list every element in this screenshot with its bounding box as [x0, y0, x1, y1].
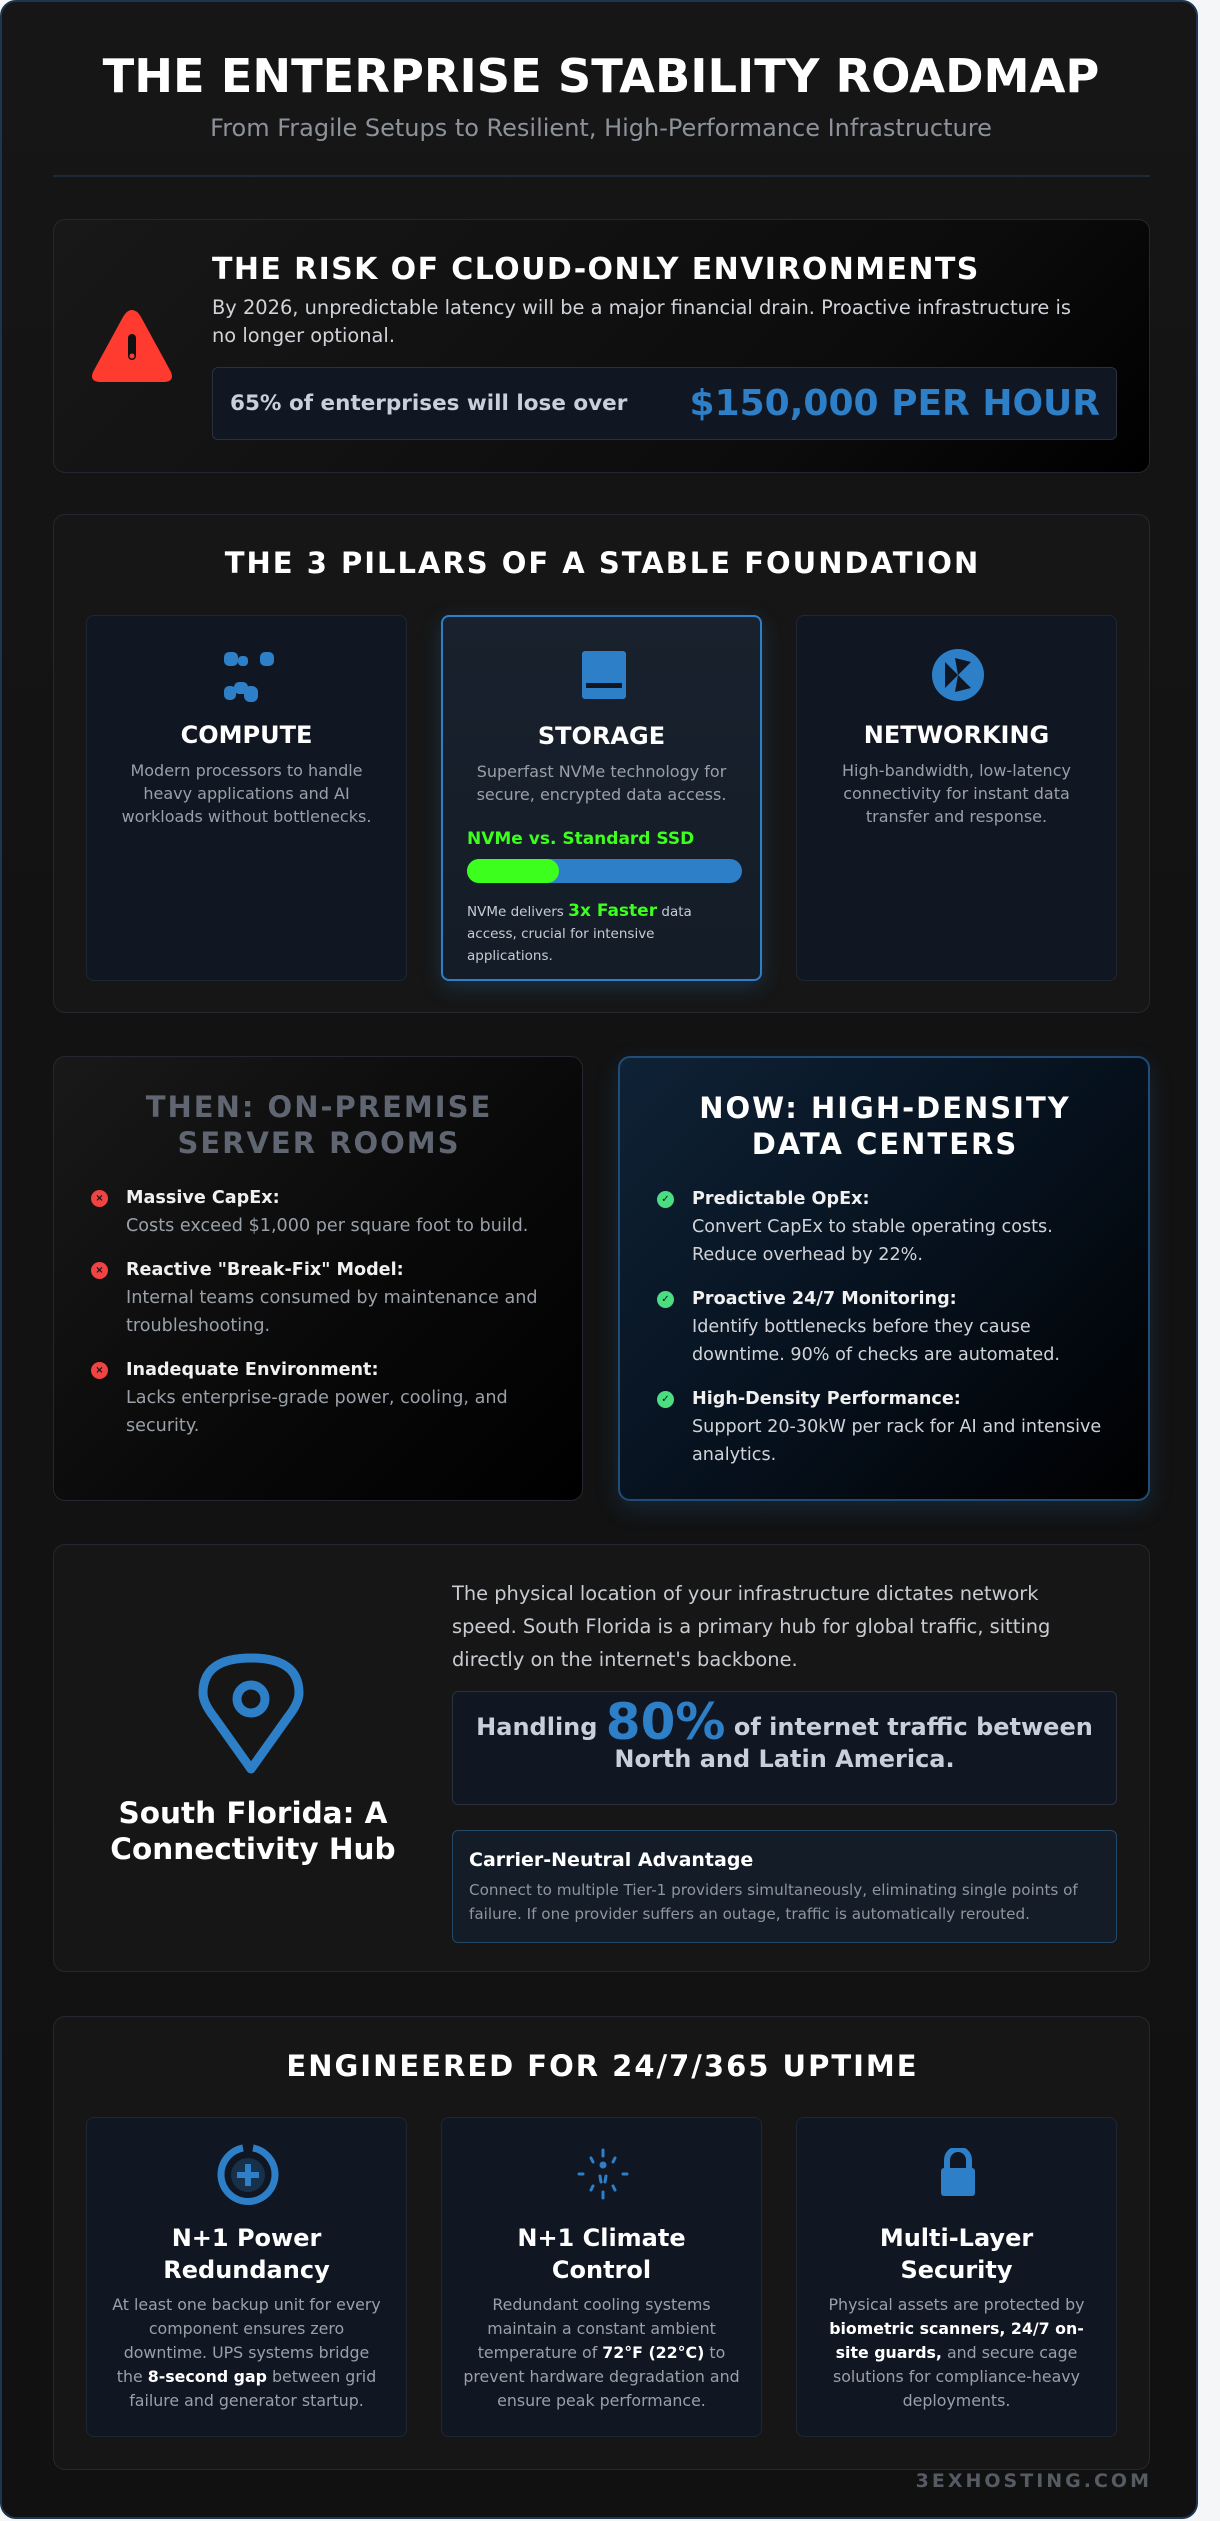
panel: risk [53, 219, 1150, 473]
then item 3 [91, 1360, 508, 1436]
callout: carrier neutral: Carrier-Neutral Advantage [469, 1849, 753, 1871]
now item 3: Support 20-30kW per rack for AI and intensive analytics. [692, 1417, 1101, 1465]
card: storage: Superfast NVMe technology for secure, encrypted data access. [477, 762, 726, 804]
pillars heading: THE 3 PILLARS OF A STABLE FOUNDATION [225, 546, 980, 580]
panel: pillars [53, 514, 1150, 1013]
then item 2 [91, 1260, 538, 1336]
panel: south florida [53, 1544, 1150, 1972]
florida title [110, 1796, 396, 1866]
icon: lock [941, 2148, 975, 2196]
now item 2: Identify bottlenecks before they cause downtime. 90% of checks are automated. [692, 1317, 1060, 1365]
risk heading: THE RISK OF CLOUD-ONLY ENVIRONMENTS [212, 252, 980, 287]
card: networking: NETWORKING [864, 721, 1049, 749]
then item 3: Inadequate Environment: [126, 1360, 378, 1380]
card: storage [441, 615, 762, 981]
subtitle: From Fragile Setups to Resilient, High-Performance Infrastructure [210, 114, 992, 142]
then item 2: Reactive "Break-Fix" Model: [126, 1260, 404, 1280]
panel: now [618, 1056, 1150, 1501]
panel: now: ✓ [661, 1194, 670, 1205]
then heading: THEN: ON-PREMISE [146, 1090, 492, 1124]
then item 1: Massive CapEx: [126, 1188, 280, 1208]
icon: power [218, 2144, 278, 2205]
stat box: 80%: North and Latin America. [614, 1745, 955, 1773]
callout: carrier neutral: Connect to multiple Tier-1 providers simultaneously, eliminating single points of failure. If one provider suffers an outage, traffic is automatically rerouted. [469, 1881, 1078, 1923]
card: power: Redundancy [163, 2256, 330, 2284]
card: compute: Modern processors to handle heavy applications and AI workloads without bottlenecks. [122, 761, 371, 826]
stat box: 80% [452, 1691, 1117, 1805]
then item 1: Costs exceed $1,000 per square foot to build. [126, 1216, 528, 1236]
card: storage: STORAGE [538, 722, 665, 750]
panel: now: ✓ [661, 1394, 670, 1405]
icon: networking [932, 649, 984, 701]
card: security [796, 2117, 1117, 2437]
card: climate: Control [552, 2256, 651, 2284]
bar chart: NVMe vs SSD: NVMe vs. Standard SSD [467, 829, 694, 849]
panel: uptime [53, 2016, 1150, 2470]
card: networking [796, 615, 1117, 981]
stat box: $150,000 PER HOUR [690, 383, 1100, 424]
now heading: DATA CENTERS [752, 1127, 1018, 1161]
panel: now: ✓ [661, 1294, 670, 1305]
then heading [146, 1090, 492, 1160]
panel: then: × [95, 1365, 104, 1376]
stat box: 80%: Handling 80% of internet traffic between [476, 1693, 1093, 1751]
icon: compute [224, 652, 274, 702]
card: compute: COMPUTE [181, 721, 312, 749]
uptime heading: ENGINEERED FOR 24/7/365 UPTIME [286, 2049, 919, 2083]
card: security: Security [900, 2256, 1013, 2284]
card: power [86, 2117, 407, 2437]
panel: then: × [95, 1193, 104, 1204]
risk text: By 2026, unpredictable latency will be a major financial drain. Proactive infrastructure is no longer optional. [212, 296, 1071, 347]
florida text: The physical location of your infrastructure dictates network speed. South Florida is a primary hub for global traffic, sitting directly on the internet's backbone. [452, 1582, 1050, 1671]
icon: warning triangle [92, 310, 172, 382]
now item 2: Proactive 24/7 Monitoring: [692, 1289, 957, 1309]
bar chart: NVMe vs SSD [467, 829, 742, 883]
now item 3 [657, 1389, 1101, 1465]
then item 2: Internal teams consumed by maintenance and troubleshooting. [126, 1288, 538, 1336]
storage note: NVMe delivers 3x Faster data access, crucial for intensive applications. [467, 901, 692, 964]
now item 2 [657, 1289, 1060, 1365]
now item 3: High-Density Performance: [692, 1389, 961, 1409]
then item 1 [91, 1188, 528, 1236]
stat box [212, 367, 1117, 440]
icon: storage [582, 651, 626, 699]
card: climate [441, 2117, 762, 2437]
title: THE ENTERPRISE STABILITY ROADMAP [103, 49, 1099, 103]
card: climate: Redundant cooling systems maintain a constant ambient temperature of 72°F (22°C) to prevent hardware degradation and ensure peak performance. [463, 2295, 740, 2410]
card: security: Multi-Layer [880, 2224, 1033, 2252]
now item 1: Predictable OpEx: [692, 1189, 869, 1209]
icon: location pin [198, 1654, 304, 1774]
card: networking: High-bandwidth, low-latency connectivity for instant data transfer and response. [842, 761, 1071, 826]
card: power: At least one backup unit for every component ensures zero downtime. UPS systems bridge the 8-second gap between grid failure and generator startup. [112, 2295, 381, 2410]
now heading: NOW: HIGH-DENSITY [699, 1091, 1071, 1125]
panel: then [53, 1056, 583, 1501]
card: compute [86, 615, 407, 981]
footer brand: 3EXHOSTING.COM [916, 2470, 1152, 2492]
now item 1: Convert CapEx to stable operating costs. Reduce overhead by 22%. [692, 1217, 1053, 1265]
card: climate: N+1 Climate [517, 2224, 686, 2252]
stat box: 65% of enterprises will lose over [230, 391, 627, 416]
card: power: N+1 Power [172, 2224, 321, 2252]
icon: climate [578, 2148, 628, 2200]
florida title: South Florida: A [118, 1796, 388, 1830]
then heading: SERVER ROOMS [177, 1126, 461, 1160]
callout: carrier neutral [452, 1830, 1117, 1943]
now heading [699, 1091, 1071, 1161]
card: security: Physical assets are protected by biometric scanners, 24/7 on-site guards, and secure cage solutions for compliance-heavy deployments. [829, 2295, 1084, 2410]
florida title: Connectivity Hub [110, 1832, 396, 1866]
panel: then: × [95, 1265, 104, 1276]
then item 3: Lacks enterprise-grade power, cooling, and security. [126, 1388, 508, 1436]
now item 1 [657, 1189, 1053, 1265]
